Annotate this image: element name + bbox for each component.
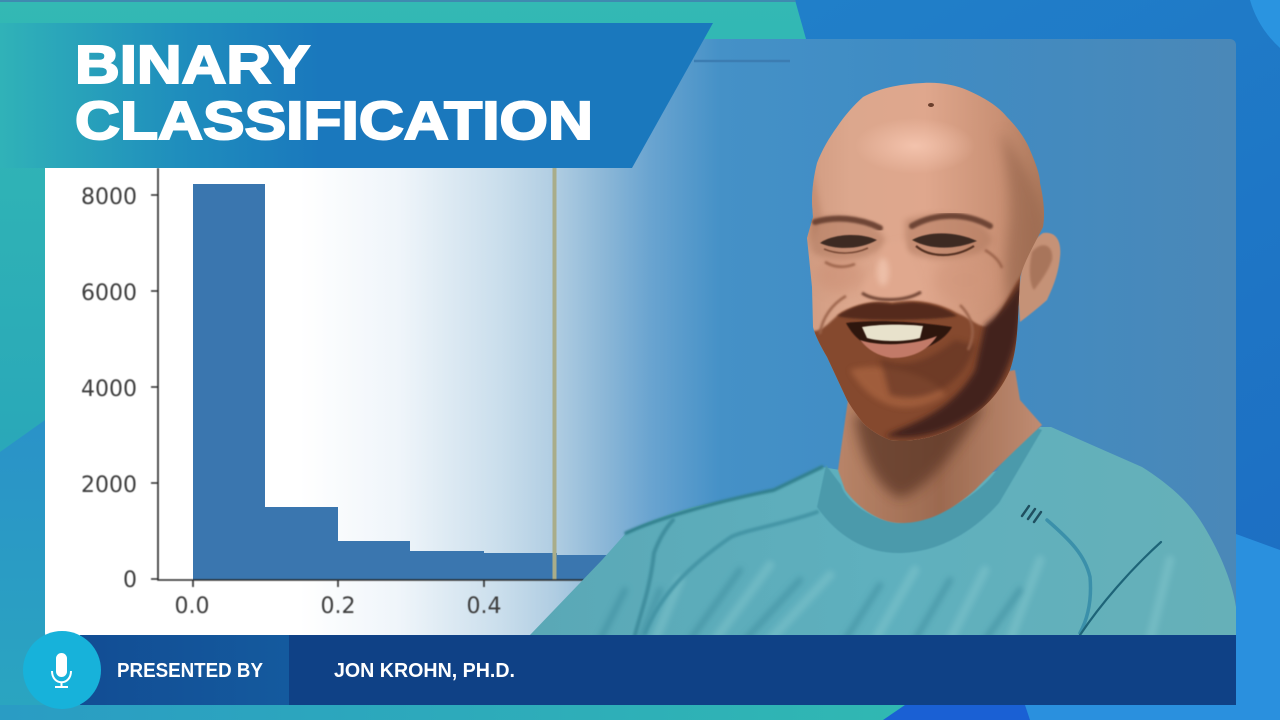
neck (838, 370, 1042, 523)
presenter bar (23, 631, 1236, 709)
left temple shading (808, 178, 822, 242)
moustache (837, 302, 957, 320)
y axis labels: 2000 (81, 473, 137, 498)
icon: microphone badge (23, 631, 101, 709)
head side shadow (1000, 138, 1044, 298)
y axis labels (81, 185, 137, 593)
shirt (530, 427, 1236, 640)
y axis labels: 0 (123, 568, 137, 593)
smile lines (820, 250, 1002, 350)
collar (817, 426, 1042, 553)
title text: CLASSIFICATION (75, 91, 593, 151)
panel: chart and portrait backdrop (45, 39, 1236, 639)
head (800, 80, 1050, 450)
x axis labels: 0.2 (320, 594, 356, 619)
x axis labels: 0.4 (466, 594, 502, 619)
beard (814, 272, 1022, 440)
y axis labels: 4000 (81, 377, 137, 402)
neck shadow (855, 405, 985, 498)
eye socket shading (812, 216, 885, 260)
title banner (0, 23, 713, 168)
eyes (820, 233, 977, 255)
y axis labels: 8000 (81, 185, 137, 210)
lower lip (860, 336, 937, 358)
beard dark under jaw (885, 280, 1022, 438)
head highlight (870, 125, 964, 166)
x axis labels (175, 595, 502, 614)
histogram bars (193, 184, 627, 580)
portrait: smiling man in teal shirt (530, 80, 1236, 640)
nose (877, 246, 910, 304)
eyebrows (815, 216, 990, 228)
x axis labels: 0.0 (174, 594, 210, 619)
chart top rule fragment (694, 60, 790, 62)
title text: BINARY (75, 35, 310, 95)
y axis labels: 6000 (81, 281, 137, 306)
teeth (862, 325, 923, 341)
shirt seams and folds (626, 467, 822, 533)
ear (1018, 233, 1060, 322)
cheek blush (822, 262, 862, 290)
presented by label: PRESENTED BY (117, 660, 264, 682)
axes (150, 168, 584, 588)
presenter name: JON KROHN, PH.D. (334, 660, 515, 682)
shirt lower shading stripes (600, 467, 1170, 640)
stitches on shoulder (1022, 506, 1041, 522)
forehead mark (928, 103, 934, 107)
threshold line (552, 168, 556, 580)
histogram chart (81, 61, 790, 619)
chin beard texture (850, 367, 945, 407)
mouth (846, 320, 952, 348)
